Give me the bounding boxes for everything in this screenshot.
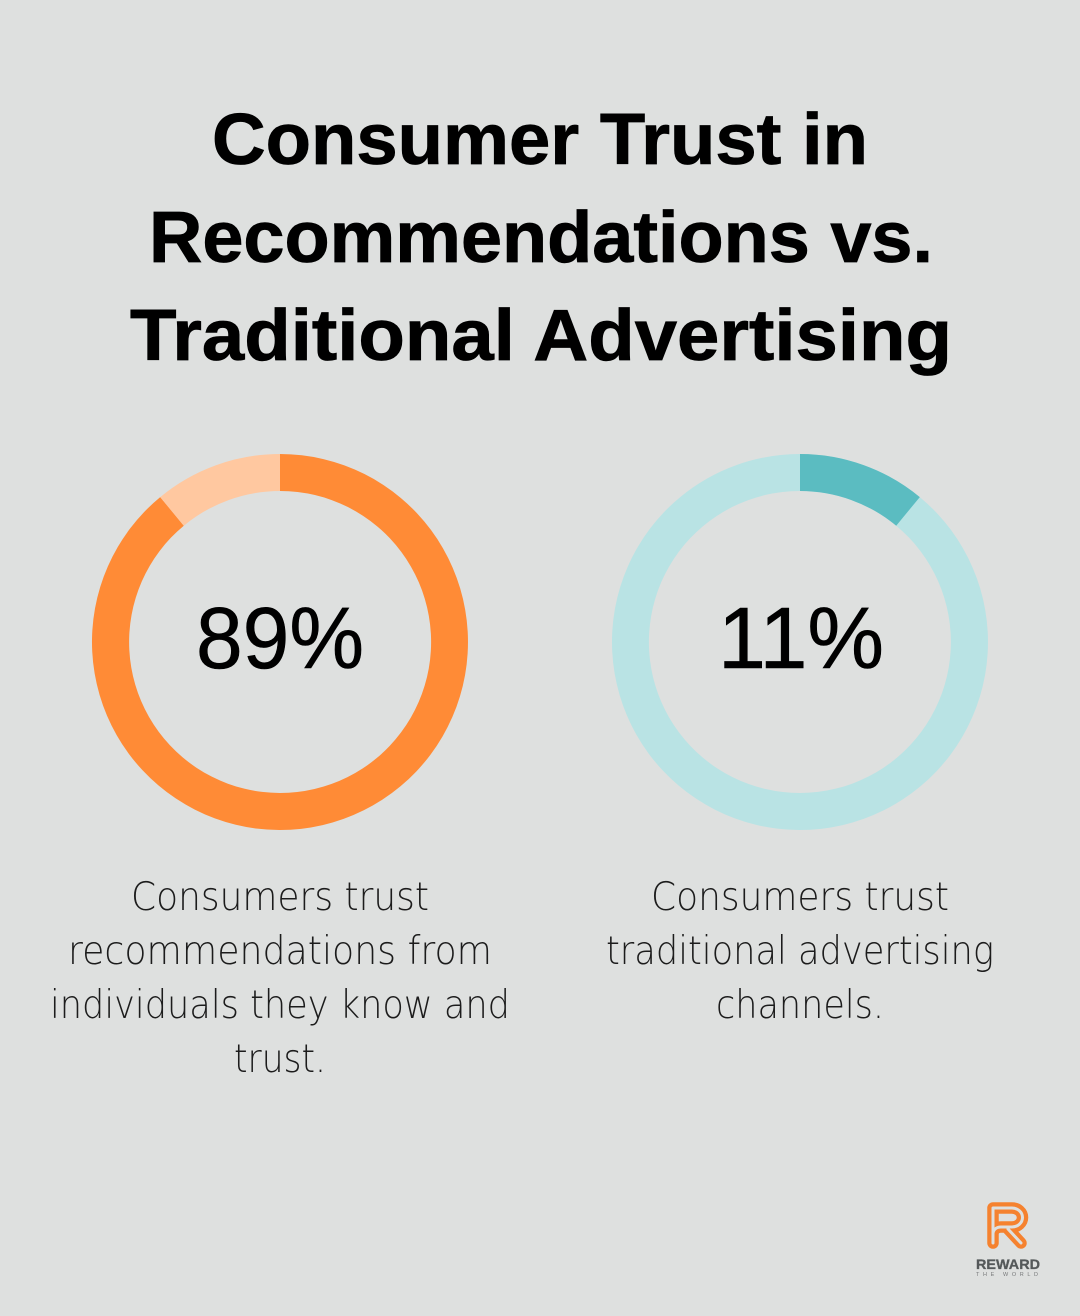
logo tagline: THE WORLD [976,1272,1038,1278]
title: Consumer Trust in [212,100,868,180]
panel: recommendations [50,454,510,1082]
logo: Reward the World [976,1208,1040,1278]
value: 11%: 11% [718,590,884,687]
title: Recommendations vs. [149,198,933,278]
description: recommendations: individuals they know and [50,983,510,1028]
logo wordmark: REWARD [976,1256,1040,1272]
description: recommendations: recommendations from [68,929,492,974]
donut chart: 11% [612,454,988,830]
description: traditional advertising: Consumers trust [651,875,949,920]
description: traditional advertising [606,875,994,1028]
description: traditional advertising: channels. [716,983,884,1028]
icon: stylised R [993,1208,1022,1243]
description: recommendations [50,875,510,1082]
title [130,100,952,376]
value: 89%: 89% [196,590,364,687]
donut chart: 89% [92,454,468,830]
panel: traditional advertising [606,454,994,1028]
description: traditional advertising: traditional advertising [606,929,994,974]
description: recommendations: Consumers trust [131,875,429,920]
title: Traditional Advertising [130,296,952,376]
description: recommendations: trust. [234,1037,326,1082]
